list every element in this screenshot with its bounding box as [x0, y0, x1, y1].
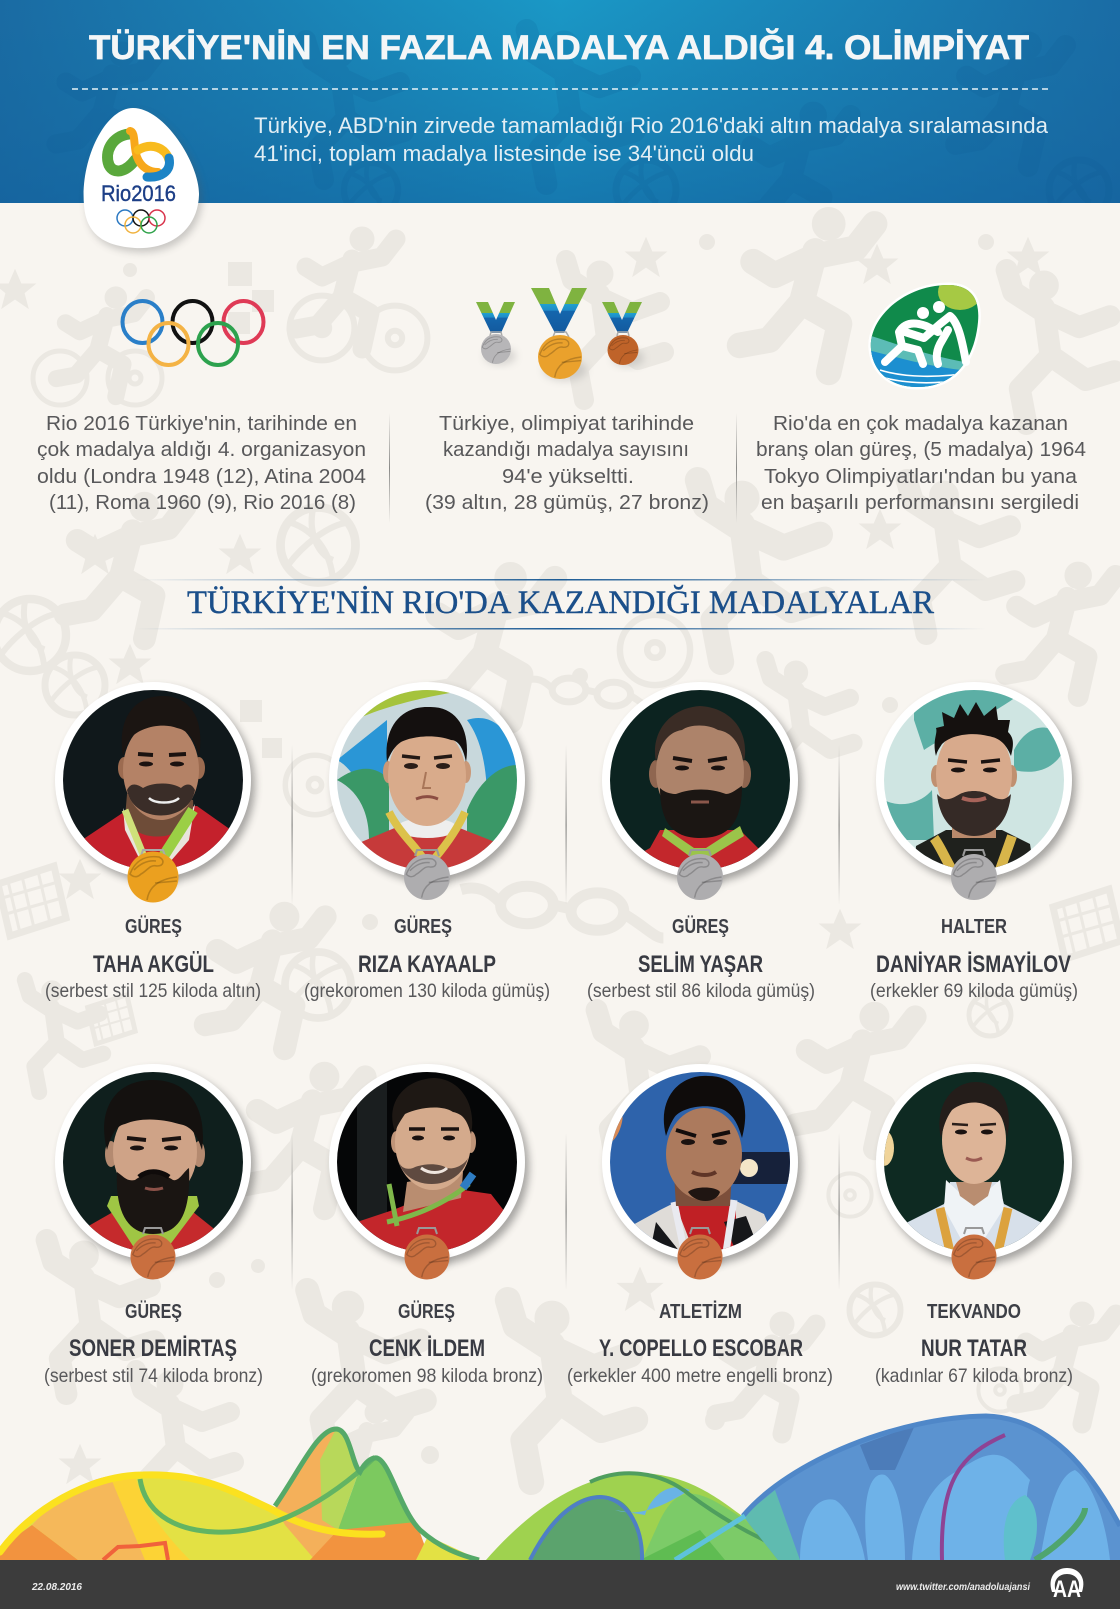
fact: wrestling: Rio'da en çok madalya kazanan [773, 412, 1068, 435]
athlete: Daniyar İsmayilov: (erkekler 69 kiloda gümüş) [870, 980, 1078, 1002]
athlete: Y. Copello Escobar: (erkekler 400 metre engelli bronz) [567, 1365, 833, 1387]
athlete: Cenk İldem [311, 1064, 543, 1387]
athlete: Nur Tatar: TEKVANDO [927, 1301, 1021, 1323]
header description text [254, 113, 1049, 166]
fact: medals organisation [37, 412, 366, 514]
athlete: Rıza Kayaalp: GÜREŞ [394, 915, 452, 938]
athlete: Y. Copello Escobar: Y. COPELLO ESCOBAR [599, 1335, 803, 1362]
fact: medals organisation: (11), Roma 1960 (9), Rio 2016 (8) [49, 491, 356, 514]
fact: wrestling: branş olan güreş, (5 madalya) 1964 [756, 438, 1086, 461]
athlete: Cenk İldem: CENK İLDEM [369, 1335, 485, 1362]
athlete: Soner Demirtaş [44, 1064, 263, 1387]
athlete: Daniyar İsmayilov [870, 682, 1078, 1002]
athlete: Nur Tatar: (kadınlar 67 kiloda bronz) [875, 1365, 1073, 1387]
athlete: Rıza Kayaalp: (grekoromen 130 kiloda gümüş) [304, 980, 550, 1002]
fact: total medals: Türkiye, olimpiyat tarihinde [439, 412, 694, 435]
header description text: 41'inci, toplam madalya listesinde ise 34'üncü oldu [254, 141, 754, 166]
section heading: TÜRKİYE'NİN RIO'DA KAZANDIĞI MADALYALAR [187, 584, 934, 621]
column dividers row 2 [292, 1133, 840, 1290]
fact: total medals: 94'e yükseltti. [502, 465, 634, 488]
header description text: Türkiye, ABD'nin zirvede tamamladığı Rio 2016'daki altın madalya sıralamasında [254, 113, 1049, 138]
athlete: Y. Copello Escobar: ATLETİZM [659, 1300, 742, 1323]
athlete: Taha Akgül: GÜREŞ [125, 915, 182, 938]
athlete: Cenk İldem: GÜREŞ [398, 1300, 455, 1323]
athlete: Selim Yaşar: GÜREŞ [672, 915, 729, 938]
athlete: Daniyar İsmayilov: DANİYAR İSMAYİLOV [876, 951, 1071, 978]
athlete: Nur Tatar [874, 1064, 1076, 1387]
athlete: Rıza Kayaalp: RIZA KAYAALP [358, 951, 496, 978]
twitter url: www.twitter.com/anadoluajansi [896, 1581, 1031, 1593]
fact: wrestling: en başarılı performansını sergiledi [761, 491, 1079, 514]
fact: wrestling: Tokyo Olimpiyatları'ndan bu yana [764, 465, 1078, 488]
fact: total medals: (39 altın, 28 gümüş, 27 bronz) [425, 491, 709, 514]
fact: total medals [425, 412, 709, 514]
column dividers row 1 [292, 745, 840, 905]
icon: olympic rings [122, 301, 264, 365]
Rio 2016 logo: Rio2016 [101, 181, 176, 206]
athlete: Soner Demirtaş: SONER DEMİRTAŞ [69, 1335, 237, 1362]
fact: total medals: kazandığı madalya sayısını [443, 438, 689, 461]
athlete: Soner Demirtaş: GÜREŞ [125, 1300, 182, 1323]
athlete: Y. Copello Escobar [567, 1064, 833, 1387]
athlete: Taha Akgül [45, 682, 261, 1002]
fact: medals organisation: Rio 2016 Türkiye'nin, tarihinde en [46, 412, 357, 435]
dashed divider [72, 88, 1050, 90]
icon: Anadolu Agency logo [1051, 1568, 1083, 1603]
athlete: Rıza Kayaalp [304, 682, 550, 1002]
fact: medals organisation: oldu (Londra 1948 (12), Atina 2004 [37, 465, 366, 488]
athlete: Nur Tatar: NUR TATAR [921, 1335, 1027, 1362]
three column facts [37, 412, 1086, 523]
icon: three medals [476, 288, 644, 381]
Rio 2016 logo [84, 108, 202, 252]
icon: wrestling pictogram [860, 274, 990, 395]
athlete: Soner Demirtaş: (serbest stil 74 kiloda bronz) [44, 1365, 263, 1387]
athlete: Selim Yaşar: SELİM YAŞAR [638, 951, 763, 978]
athlete: Cenk İldem: (grekoromen 98 kiloda bronz) [311, 1365, 543, 1387]
athlete: Taha Akgül: (serbest stil 125 kiloda altın) [45, 980, 261, 1002]
fact: wrestling [756, 412, 1086, 514]
athlete: Selim Yaşar: (serbest stil 86 kiloda gümüş) [587, 980, 815, 1002]
header band [0, 0, 1120, 203]
athlete: Daniyar İsmayilov: HALTER [941, 916, 1007, 938]
athlete: Taha Akgül: TAHA AKGÜL [93, 951, 214, 978]
icon: Anadolu Agency logo: AA [1053, 1576, 1081, 1603]
Rio mountains illustration [0, 1416, 1120, 1560]
athlete: Selim Yaşar [587, 682, 815, 1002]
date: 22.08.2016 [31, 1581, 82, 1593]
title: TÜRKİYE'NİN EN FAZLA MADALYA ALDIĞI 4. OLİMPİYAT [89, 29, 1029, 67]
footer bar [0, 1560, 1120, 1609]
fact: medals organisation: çok madalya aldığı 4. organizasyon [37, 438, 366, 461]
